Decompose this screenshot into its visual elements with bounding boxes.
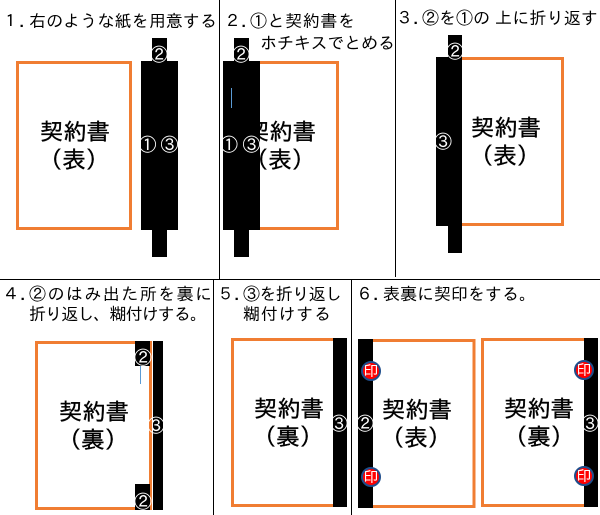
contract paper front: 契約書	[40, 119, 110, 143]
contract paper front	[18, 62, 130, 228]
black strip	[330, 338, 348, 507]
contract paper front, partly covered: 契約書	[246, 119, 316, 143]
panel: step 1	[2, 12, 217, 257]
black strip stapled over paper: ②	[232, 45, 250, 64]
black strip on back with folded tabs: ③	[147, 416, 165, 435]
black strip on back with folded tabs: ②	[134, 348, 152, 367]
heading: step 6: ６．	[356, 286, 390, 303]
contract paper front: 契約書	[471, 115, 541, 139]
black strip on back with folded tabs	[134, 341, 165, 511]
folded black strip: ③	[434, 132, 452, 151]
heading: step 3	[396, 9, 598, 27]
seal: bottom right: 印	[576, 468, 592, 483]
heading: step 4: ②のはみ出た所を裏に	[29, 285, 212, 303]
heading: step 4	[3, 285, 212, 323]
contract back with seals: 契約書	[504, 396, 574, 420]
panel: step 6	[356, 285, 599, 508]
contract paper front: （表）	[470, 143, 540, 167]
contract paper back: （裏）	[253, 424, 323, 448]
contract front with seals: （表）	[381, 425, 451, 449]
seal: bottom left	[362, 468, 380, 486]
contract back with seals	[482, 338, 599, 507]
heading: step 3: ②を①の	[422, 9, 490, 27]
heading: step 1: １．	[2, 13, 36, 30]
black strip on back with folded tabs: ②	[134, 492, 152, 511]
heading: step 1: 右のような紙を用意する	[29, 12, 217, 30]
heading: step 3: ３．	[396, 10, 430, 27]
folded black strip: ②	[446, 42, 464, 61]
seal: top left: 印	[364, 363, 378, 378]
contract back with seals: （裏）	[504, 424, 574, 448]
heading: step 2: ２．	[224, 13, 258, 30]
heading: step 5: 糊付けする	[243, 305, 331, 323]
seal: bottom right	[575, 467, 593, 485]
heading: step 6: 表裏に契印をする。	[383, 285, 536, 303]
black strip with numbered folds: ①	[138, 135, 156, 154]
contract front with seals	[356, 339, 474, 508]
heading: step 2: ①と契約書を	[250, 12, 355, 30]
black strip with numbered folds: ②	[150, 45, 168, 64]
contract paper back: 契約書	[59, 399, 129, 423]
black strip stapled over paper: ③	[242, 135, 260, 154]
panel: step 3	[396, 9, 598, 253]
seal: top left	[362, 362, 380, 380]
heading: step 4: 折り返し、糊付けする。	[29, 305, 207, 323]
heading: step 2	[224, 12, 395, 52]
seal: bottom left: 印	[364, 469, 378, 484]
contract paper back	[36, 342, 150, 508]
panel: step 4	[3, 285, 212, 511]
contract paper front	[455, 58, 562, 224]
contract paper back: 契約書	[254, 396, 324, 420]
contract paper front: （表）	[39, 147, 109, 171]
contract front with seals: ②	[356, 414, 374, 433]
heading: step 5: ５．	[217, 286, 251, 303]
contract paper back: （裏）	[58, 427, 128, 451]
black strip with numbered folds	[138, 38, 178, 257]
seal: top right	[575, 361, 593, 379]
black strip: ③	[330, 414, 348, 433]
heading: step 4: ４．	[3, 286, 37, 303]
heading: step 2: ホチキスでとめる	[260, 35, 395, 52]
panel: step 2	[220, 12, 395, 257]
black strip with numbered folds: ③	[160, 135, 178, 154]
heading: step 5	[217, 285, 342, 323]
heading: step 5: ③を折り返し	[243, 285, 342, 303]
black strip stapled over paper	[220, 38, 260, 257]
contract back with seals: ③	[581, 414, 599, 433]
contract front with seals: 契約書	[382, 397, 452, 421]
panel: step 5	[217, 285, 348, 507]
contract paper front, partly covered: （表）	[245, 147, 315, 171]
seal: top right: 印	[576, 362, 592, 377]
contract paper front, partly covered	[240, 62, 338, 228]
contract paper back	[232, 340, 334, 506]
heading: step 3: 上に折り返す	[495, 9, 598, 27]
black strip stapled over paper: ①	[220, 135, 238, 154]
folded black strip	[434, 35, 464, 253]
